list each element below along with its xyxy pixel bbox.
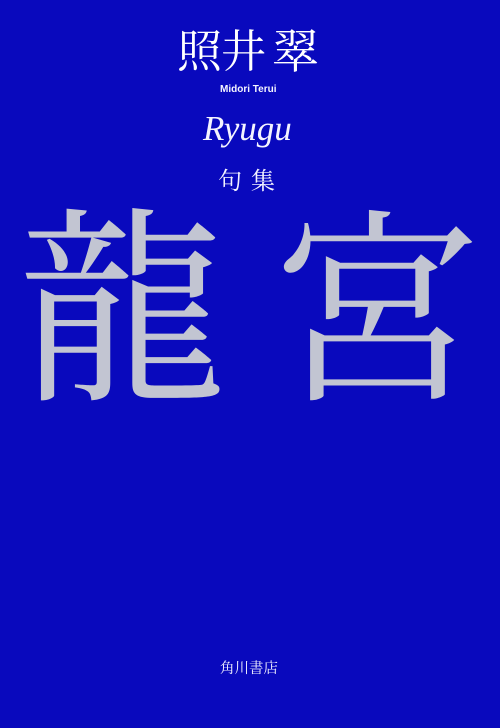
- author name: kanji surname: 照井: [177, 27, 265, 77]
- large title character: 宮: 宮: [272, 199, 480, 429]
- large title character: 龍: 龍: [17, 198, 227, 430]
- genre label: 句集: [218, 169, 284, 195]
- author name: kanji given name: 翠: [272, 27, 319, 79]
- publisher: 角川書店: [220, 661, 278, 677]
- author name in Latin: Midori Terui: [220, 84, 276, 95]
- title in Latin: Ryugu: [203, 109, 292, 148]
